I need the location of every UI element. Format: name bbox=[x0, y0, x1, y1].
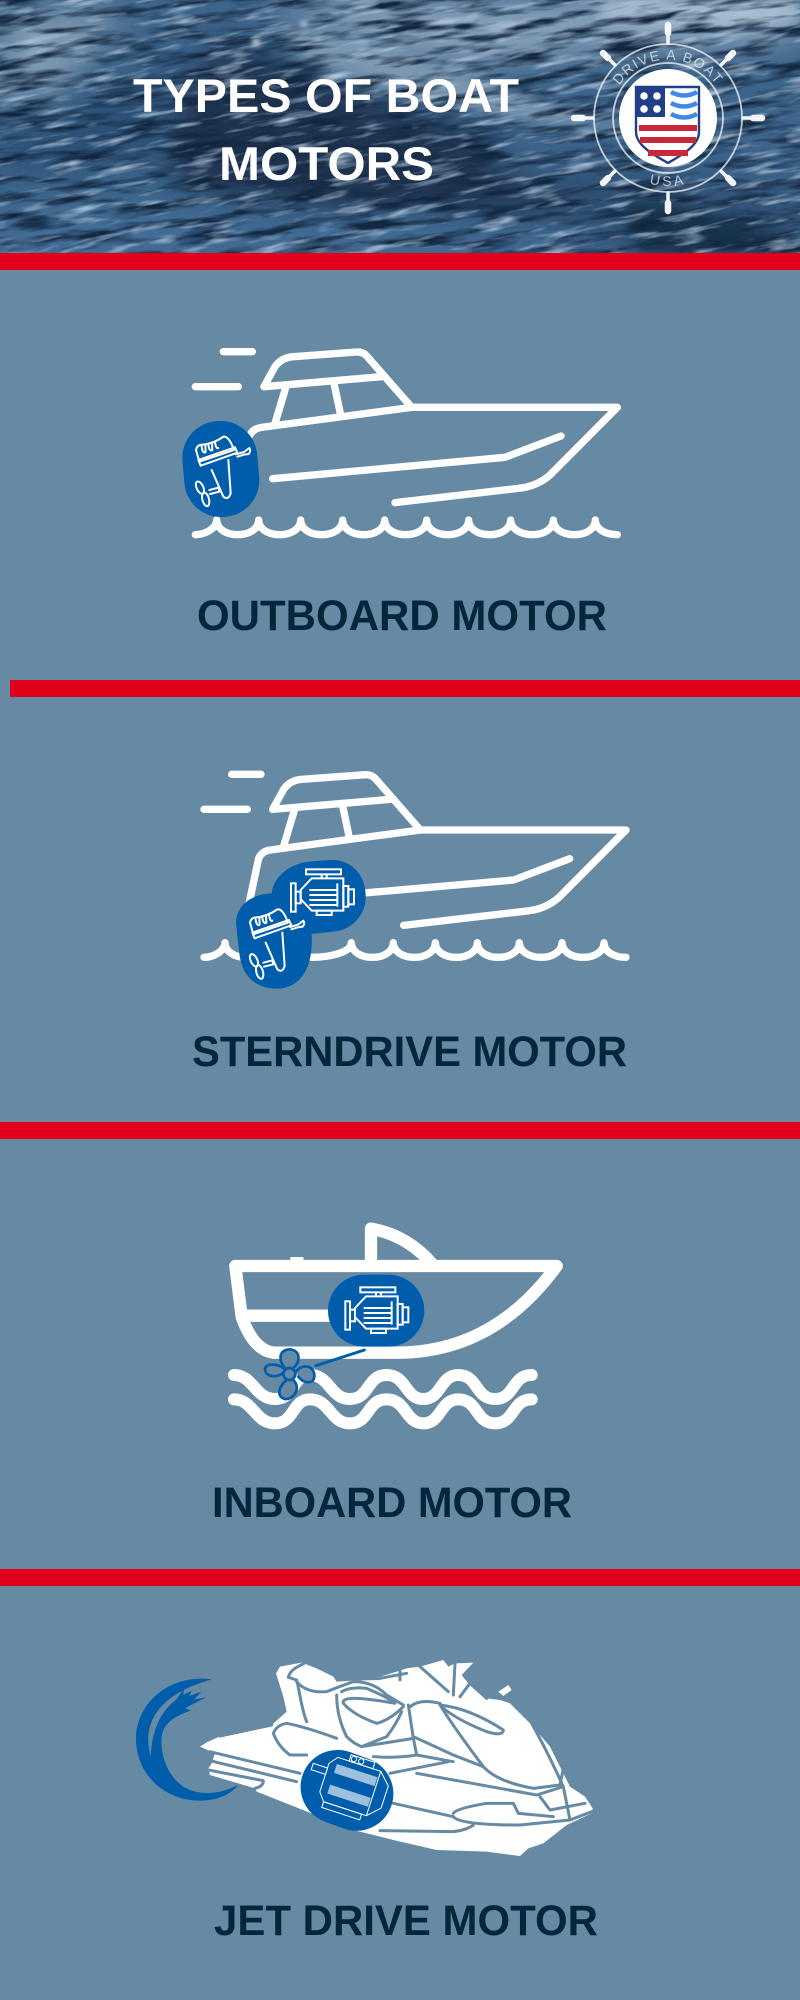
icon: speedboat outline bbox=[234, 1229, 557, 1423]
logo: Drive A Boat USA ship wheel badge: USA bbox=[650, 174, 684, 186]
red divider bar 2 bbox=[10, 680, 800, 697]
red divider bar 3 bbox=[0, 1122, 800, 1139]
heading: outboard motor: OUTBOARD MOTOR bbox=[197, 592, 607, 640]
red divider bar 4 bbox=[0, 1569, 800, 1586]
icon: propeller and shaft bbox=[265, 1349, 364, 1399]
heading: inboard motor: INBOARD MOTOR bbox=[212, 1479, 572, 1527]
heading: sterndrive motor: STERNDRIVE MOTOR bbox=[192, 1028, 627, 1076]
logo: Drive A Boat USA ship wheel badge: DRIVE A BOAT bbox=[612, 50, 724, 84]
icon: electric motor badge bbox=[290, 1739, 404, 1841]
title bbox=[133, 69, 519, 190]
title: MOTORS bbox=[219, 137, 434, 190]
icon: engine and outboard badges bbox=[236, 860, 366, 989]
icon: cruiser boat outline bbox=[204, 774, 626, 957]
icon: cruiser boat outline bbox=[195, 352, 617, 535]
icon: engine bbox=[291, 869, 354, 915]
panel: outboard motor bbox=[179, 352, 617, 640]
icon: water spray swirl bbox=[136, 1679, 238, 1801]
header: ocean wave photo bbox=[0, 0, 800, 253]
panel: jet drive motor bbox=[136, 1660, 598, 1945]
icon: outboard motor bbox=[248, 909, 304, 980]
red divider bar 1 bbox=[0, 253, 800, 270]
logo: Drive A Boat USA ship wheel badge bbox=[570, 22, 766, 214]
icon: engine badge bbox=[328, 1275, 424, 1347]
heading: jet drive motor: JET DRIVE MOTOR bbox=[214, 1897, 598, 1945]
icon: flag shield bbox=[636, 87, 699, 163]
icon: outboard motor badge bbox=[179, 418, 262, 520]
icon: jet ski bbox=[200, 1660, 593, 1856]
panel: inboard motor bbox=[212, 1229, 572, 1527]
panel: sterndrive motor bbox=[192, 774, 627, 1076]
title: TYPES OF BOAT bbox=[133, 69, 519, 122]
